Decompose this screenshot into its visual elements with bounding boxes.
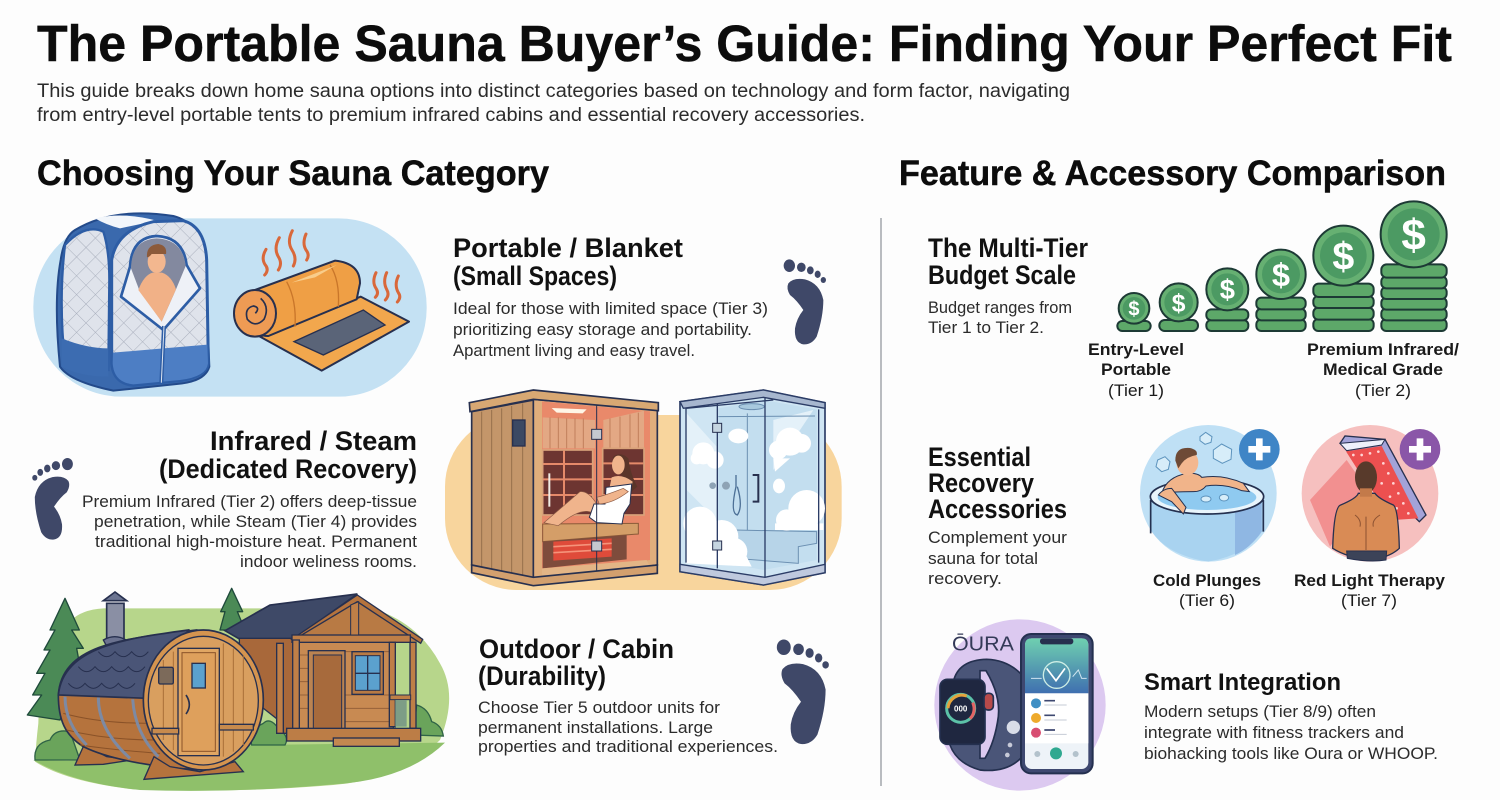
heading: budget scale: Budget Scale bbox=[928, 260, 1076, 290]
coin stack 4: $ bbox=[1272, 256, 1290, 293]
icon: footprint infrared bbox=[32, 458, 73, 540]
text: portable description bbox=[453, 299, 768, 360]
coin stack 2: $ bbox=[1172, 290, 1186, 317]
icon: smartphone bbox=[1021, 634, 1093, 773]
text: smart integration description: biohacking tools like Oura or WHOOP. bbox=[1144, 744, 1438, 763]
coin stack 3 bbox=[1206, 268, 1248, 331]
text: outdoor description: properties and traditional experiences. bbox=[478, 737, 778, 756]
chart: coin stacks bbox=[1117, 201, 1447, 331]
heading: outdoor cabin bbox=[478, 634, 674, 691]
heading: portable blanket bbox=[453, 233, 683, 291]
icon: woman on bench bbox=[544, 454, 637, 526]
label: premium infrared medical grade bbox=[1307, 340, 1459, 400]
heading: essential recovery accessories: Essential bbox=[928, 442, 1031, 472]
coin stack 1 bbox=[1117, 293, 1151, 331]
icon: infrared sauna cabin bbox=[469, 390, 658, 586]
coin stack 3: $ bbox=[1220, 274, 1235, 305]
text: budget description: Budget ranges from bbox=[928, 298, 1072, 317]
text: infrared description: Premium Infrared (Tier 2) offers deep-tissue bbox=[82, 492, 417, 511]
label: red light therapy bbox=[1294, 571, 1446, 610]
text: infrared description: indoor weliness rooms. bbox=[240, 552, 417, 571]
icon: cabin bbox=[225, 594, 423, 746]
label: red light therapy: (Tier 7) bbox=[1341, 591, 1397, 610]
heading: outdoor cabin: (Durability) bbox=[478, 661, 606, 691]
label: entry-level portable: Entry-Level bbox=[1088, 340, 1184, 359]
icon: watch phone and oura bbox=[934, 619, 1106, 791]
icon: smartwatch: 000 bbox=[954, 704, 968, 713]
text: accessories description: Complement your bbox=[928, 528, 1067, 547]
coin stack 5: $ bbox=[1332, 235, 1354, 279]
text: outdoor description: Choose Tier 5 outdoor units for bbox=[478, 698, 720, 717]
label: premium infrared medical grade: Medical Grade bbox=[1323, 360, 1443, 379]
label: red light therapy: Red Light Therapy bbox=[1294, 571, 1446, 590]
illustration: infrared cabin and steam room bbox=[445, 390, 842, 590]
text: portable description: Ideal for those with limited space (Tier 3) bbox=[453, 299, 768, 318]
text: smart integration description: Modern setups (Tier 8/9) often bbox=[1144, 702, 1376, 721]
illustration: portable tent and blanket bbox=[33, 213, 427, 397]
heading: portable blanket: Portable / Blanket bbox=[453, 233, 683, 263]
coin stack 5 bbox=[1313, 226, 1374, 331]
text: budget description bbox=[928, 298, 1072, 337]
intro text bbox=[37, 81, 1070, 126]
label: entry-level portable bbox=[1088, 340, 1184, 400]
heading: budget scale: The Multi-Tier bbox=[928, 233, 1088, 263]
intro text: This guide breaks down home sauna options into distinct categories based on technology and form factor, navigating bbox=[37, 81, 1070, 102]
icon: footprint outdoor bbox=[777, 639, 829, 744]
title: The Portable Sauna Buyer’s Guide: Finding Your Perfect Fit bbox=[37, 15, 1452, 72]
heading: essential recovery accessories: Accessories bbox=[928, 494, 1067, 524]
icon: heat waves bbox=[263, 231, 400, 302]
heading: infrared steam: (Dedicated Recovery) bbox=[159, 454, 417, 484]
text: infrared description bbox=[82, 492, 417, 571]
heading: infrared steam: Infrared / Steam bbox=[210, 426, 417, 456]
text: accessories description: recovery. bbox=[928, 569, 1002, 588]
label: cold plunges: Cold Plunges bbox=[1153, 571, 1261, 590]
icon: barrel sauna bbox=[58, 592, 263, 779]
heading: outdoor cabin: Outdoor / Cabin bbox=[479, 634, 674, 664]
label: entry-level portable: (Tier 1) bbox=[1108, 381, 1164, 400]
heading: essential recovery accessories: Recovery bbox=[928, 468, 1034, 498]
text: smart integration description bbox=[1144, 702, 1438, 763]
icon: cold plunge bbox=[1140, 425, 1280, 562]
label: cold plunges: (Tier 6) bbox=[1179, 591, 1235, 610]
icon: red light therapy bbox=[1302, 425, 1440, 562]
illustration: outdoor barrel sauna and cabin bbox=[27, 588, 449, 791]
icon: pop-up tent bbox=[57, 213, 209, 391]
text: smart integration description: integrate with fitness trackers and bbox=[1144, 723, 1404, 742]
icon: pine trees bbox=[27, 588, 245, 720]
coin stack 1: $ bbox=[1128, 299, 1140, 321]
icon: plus badge purple bbox=[1400, 429, 1440, 470]
heading: portable blanket: (Small Spaces) bbox=[453, 261, 617, 291]
coin stack 6: $ bbox=[1401, 211, 1426, 260]
icon: plus badge blue bbox=[1239, 429, 1280, 470]
heading: choosing your sauna category: Choosing Your Sauna Category bbox=[37, 154, 550, 193]
heading: infrared steam bbox=[159, 426, 417, 484]
text: budget description: Tier 1 to Tier 2. bbox=[928, 318, 1044, 337]
icon: heated blanket roll bbox=[234, 261, 409, 371]
coin stack 4 bbox=[1256, 250, 1306, 331]
text: accessories description: sauna for total bbox=[928, 549, 1038, 568]
text: infrared description: penetration, while Steam (Tier 4) provides bbox=[94, 512, 417, 531]
text: outdoor description: permanent installations. Large bbox=[478, 718, 713, 737]
label: cold plunges bbox=[1153, 571, 1261, 610]
text: infrared description: traditional high-moisture heat. Permanent bbox=[95, 532, 417, 551]
text: outdoor description bbox=[478, 698, 778, 756]
icon: smartwatch bbox=[940, 659, 1025, 770]
label: premium infrared medical grade: (Tier 2) bbox=[1355, 381, 1411, 400]
icon: footprint portable bbox=[784, 259, 826, 344]
icon: glass steam room bbox=[680, 390, 825, 585]
text: accessories description bbox=[928, 528, 1067, 588]
coin stack 2 bbox=[1159, 283, 1198, 331]
icon: bushes bbox=[35, 705, 443, 760]
label: entry-level portable: Portable bbox=[1101, 360, 1171, 379]
heading: budget scale bbox=[928, 233, 1088, 290]
text: portable description: prioritizing easy storage and portability. bbox=[453, 320, 752, 339]
heading: smart integration: Smart Integration bbox=[1144, 669, 1341, 696]
label: premium infrared medical grade: Premium Infrared/ bbox=[1307, 340, 1459, 359]
label: oura logo: ŌURA bbox=[952, 633, 1014, 656]
heading: feature and accessory comparison: Feature & Accessory Comparison bbox=[899, 154, 1446, 193]
text: portable description: Apartment living and easy travel. bbox=[453, 341, 695, 360]
heading: essential recovery accessories bbox=[928, 442, 1067, 524]
intro text: from entry-level portable tents to premium infrared cabins and essential recovery accessories. bbox=[37, 105, 865, 126]
steam clouds bbox=[683, 428, 825, 567]
icon: person in tent bbox=[138, 244, 176, 322]
coin stack 6 bbox=[1381, 201, 1447, 331]
